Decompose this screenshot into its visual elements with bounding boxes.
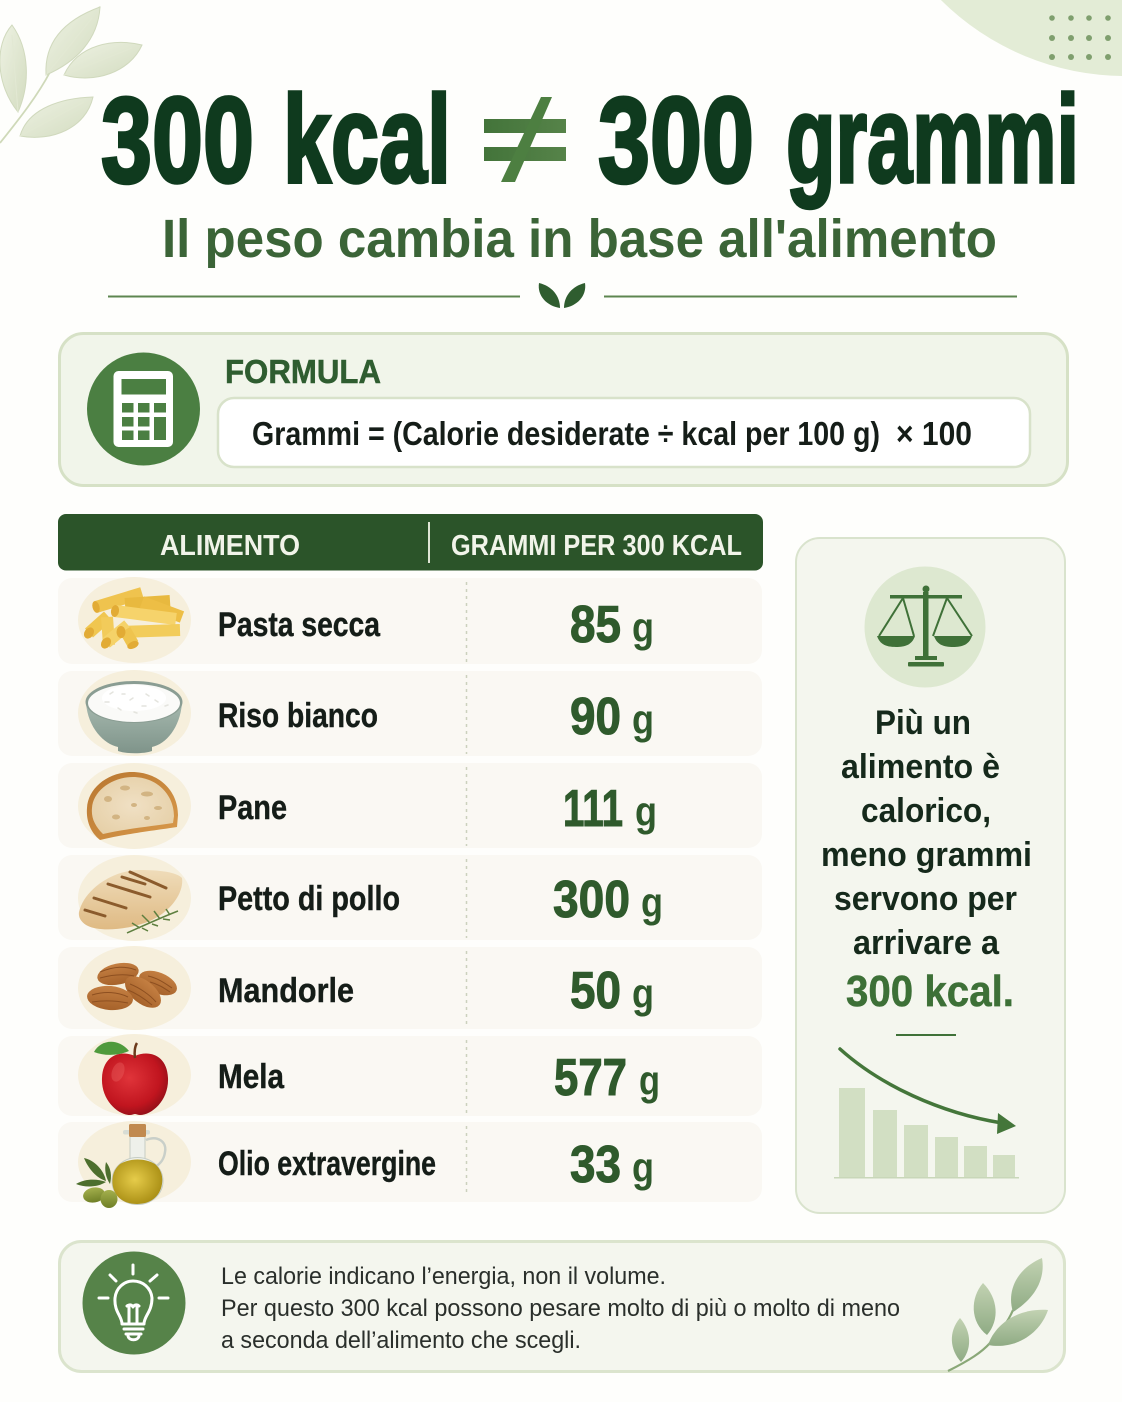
formula box: Grammi = (Calorie desiderate ÷ kcal per 100 g) xyxy=(252,415,880,452)
side text: servono per xyxy=(834,880,1017,918)
value xyxy=(570,962,654,1020)
table header: GRAMMI PER 300 KCAL xyxy=(451,530,742,562)
row: riso bianco xyxy=(58,670,762,756)
formula heading: FORMULA xyxy=(225,353,381,390)
value: 85 xyxy=(570,596,621,654)
decorative leaves top left xyxy=(0,7,142,143)
row: olio extravergine xyxy=(58,1121,762,1208)
side text: arrivare a xyxy=(853,924,1000,962)
value: g xyxy=(639,1057,660,1104)
value xyxy=(570,596,654,654)
label: Pane xyxy=(218,789,287,827)
label: Pasta secca xyxy=(218,606,381,644)
table header xyxy=(58,514,763,570)
icon: light bulb xyxy=(82,1252,186,1354)
row: petto di pollo xyxy=(58,855,762,941)
icon: apple xyxy=(78,1034,191,1116)
value: g xyxy=(632,696,654,743)
row: mandorle xyxy=(58,946,762,1030)
label: Riso bianco xyxy=(218,697,378,735)
icon: almonds xyxy=(78,946,191,1030)
value: 111 xyxy=(563,780,623,838)
title: 300 xyxy=(598,72,754,208)
row: pasta secca xyxy=(58,577,762,664)
note text: a seconda dell’alimento che scegli. xyxy=(221,1327,581,1354)
subtitle: Il peso cambia in base all'alimento xyxy=(162,209,997,269)
side text: Più un xyxy=(875,704,971,742)
panel: bottom note xyxy=(60,1242,1064,1372)
value: g xyxy=(632,1144,654,1191)
value xyxy=(570,1136,654,1194)
side text: calorico, xyxy=(861,792,991,830)
icon: scale xyxy=(864,566,986,688)
title: kcal xyxy=(283,71,451,209)
title: 300 xyxy=(101,72,254,208)
label: Mela xyxy=(218,1058,285,1096)
not-equal sign xyxy=(484,97,566,182)
icon: calculator xyxy=(87,352,200,466)
label: Olio extravergine xyxy=(218,1145,436,1183)
icon: pasta xyxy=(78,577,191,663)
icon: leaf sprig xyxy=(948,1258,1048,1371)
value: 90 xyxy=(570,688,621,746)
row: mela xyxy=(58,1034,762,1116)
icon: bread xyxy=(78,763,191,849)
decorative corner blob with dots xyxy=(864,0,1122,76)
value xyxy=(570,688,654,746)
row: pane xyxy=(58,763,762,849)
value: g xyxy=(635,788,657,835)
value: 33 xyxy=(570,1136,621,1194)
side text: 300 kcal. xyxy=(846,967,1014,1016)
chart: decreasing bars with arrow xyxy=(834,1049,1019,1178)
value: g xyxy=(632,970,654,1017)
panel: formula xyxy=(60,334,1068,486)
note text: Per questo 300 kcal possono pesare molto di più o molto di meno xyxy=(221,1295,900,1322)
table header: ALIMENTO xyxy=(160,530,300,562)
icon: olive oil xyxy=(76,1121,191,1208)
formula box: × 100 xyxy=(896,415,972,452)
value: 300 xyxy=(553,871,630,929)
value: g xyxy=(632,604,654,651)
icon: grilled chicken xyxy=(78,855,191,941)
label: Petto di pollo xyxy=(218,880,400,918)
value: 50 xyxy=(570,962,621,1020)
value: g xyxy=(641,879,663,926)
arrow xyxy=(840,1049,1016,1134)
label: Mandorle xyxy=(218,972,354,1010)
note text: Le calorie indicano l’energia, non il volume. xyxy=(221,1263,666,1290)
note text xyxy=(221,1263,900,1354)
icon: rice bowl xyxy=(78,670,191,756)
side text xyxy=(821,704,1032,1016)
side text: meno grammi xyxy=(821,836,1032,874)
panel: side note xyxy=(796,538,1065,1213)
side text: alimento è xyxy=(841,748,1000,786)
divider with leaf xyxy=(108,283,1017,308)
formula box xyxy=(218,398,1030,467)
title xyxy=(101,71,1079,209)
value: 577 xyxy=(554,1049,627,1107)
